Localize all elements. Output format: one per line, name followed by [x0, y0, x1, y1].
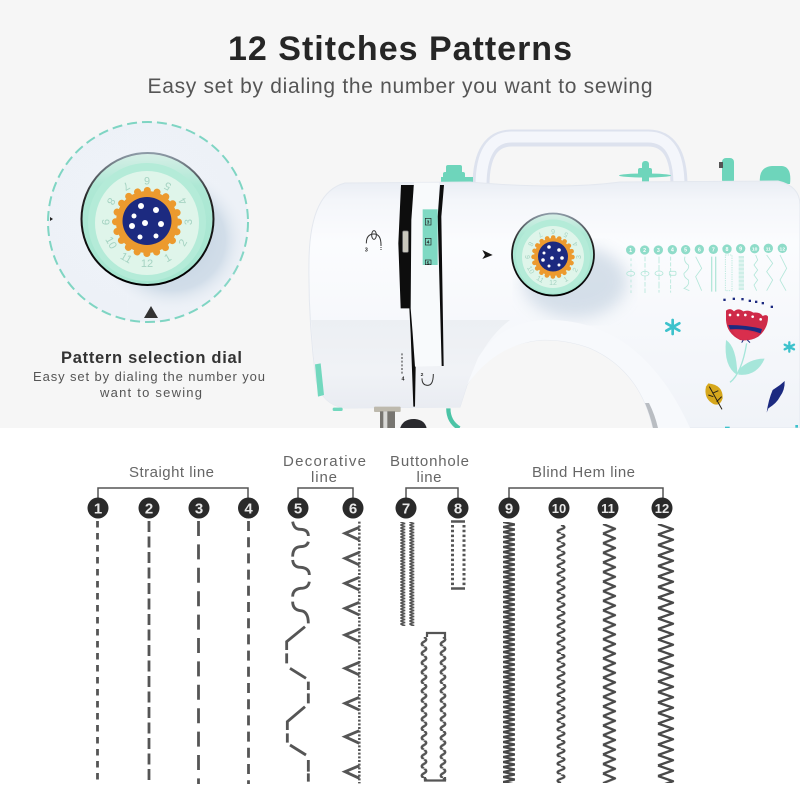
badges 9 to 12: 10 [552, 501, 566, 516]
dial numbers: 8 [104, 195, 117, 207]
stitch badge numbers: 8 [726, 247, 729, 253]
bracket [98, 488, 248, 498]
bottom section background [0, 428, 800, 800]
machine dial numbers: 2 [572, 267, 580, 274]
top section background [0, 0, 800, 428]
dial numbers: 2 [177, 237, 190, 249]
dial numbers: 12 [141, 258, 153, 270]
bracket [509, 488, 663, 498]
stitch badge numbers: 3 [657, 248, 660, 254]
dial cast shadow [523, 246, 627, 318]
green foot [333, 408, 343, 411]
machine dial numbers: 4 [572, 240, 580, 247]
heading: straight line: Straight line [129, 464, 214, 481]
navy feather leaf [767, 381, 785, 413]
heading: blind hem line: Blind Hem line [532, 464, 635, 481]
sewing machine [309, 137, 800, 428]
printed stitch lines [627, 255, 787, 293]
direction arrow [482, 250, 493, 259]
right black slot [438, 185, 444, 366]
heading: decorative line: line [311, 469, 337, 486]
dial numbers: 7 [120, 179, 132, 192]
stitch 9 [503, 522, 515, 783]
bracket [298, 488, 353, 498]
stitch badge numbers: 5 [684, 248, 687, 254]
dial numbers: 4 [177, 195, 190, 207]
stitch badge numbers [629, 246, 785, 254]
green thread [448, 408, 459, 428]
dial numbers: 6 [144, 174, 150, 186]
stitch 8 [451, 522, 465, 588]
subtitle: Easy set by dialing the number you want to sewing [148, 75, 652, 98]
badges 5 and 6 [288, 498, 364, 518]
badges 1 to 4: 1 [94, 500, 102, 518]
green spool knob [441, 165, 473, 183]
large dial knob [82, 153, 214, 285]
presser foot [374, 407, 427, 428]
stitch number badges [626, 244, 787, 255]
stitch 11 [601, 524, 617, 783]
badges 9 to 12 [498, 498, 672, 518]
left green latch [315, 363, 324, 397]
flower leaves [726, 340, 765, 382]
dial numbers: 3 [183, 219, 195, 225]
stitch badge numbers: 12 [780, 246, 785, 252]
machine dial [512, 214, 594, 296]
machine dial numbers: 7 [536, 230, 543, 238]
stitch badge numbers: 2 [643, 248, 646, 254]
group: blind hem line [498, 464, 675, 783]
pointer triangle [144, 306, 158, 318]
badges 5 and 6: 6 [349, 500, 357, 518]
stitch badge numbers: 4 [671, 248, 674, 254]
stitch badge numbers: 10 [752, 247, 758, 253]
bracket [406, 488, 458, 498]
guide number 3: 3 [365, 248, 368, 254]
green wheel [760, 166, 790, 184]
spool pin on handle [619, 161, 671, 187]
arch rim [467, 320, 690, 428]
arch opening shadow [645, 403, 658, 428]
small teal asterisk [785, 342, 794, 352]
stitch 6 [345, 522, 359, 783]
flower dots [723, 298, 773, 308]
tension numbers: 3 [427, 219, 430, 225]
dial caption text: want to sewing [99, 385, 202, 400]
dial caption heading: Pattern selection dial [61, 349, 242, 367]
bottom teal dots [725, 425, 798, 428]
stitch badge numbers: 1 [629, 248, 632, 254]
badges 5 and 6: 5 [294, 500, 302, 518]
machine dial numbers: 10 [525, 265, 535, 275]
machine dial numbers: 8 [526, 240, 534, 247]
stitch 4 [247, 521, 250, 784]
stitch 7 [400, 522, 414, 626]
badges 9 to 12: 12 [655, 501, 669, 516]
machine dial numbers: 1 [563, 276, 570, 284]
dial numbers: 11 [118, 250, 134, 266]
tension numbers [425, 218, 431, 266]
stitch 2 [148, 521, 150, 782]
machine dial numbers: 9 [523, 255, 530, 259]
dial numbers: 9 [99, 219, 111, 225]
machine dial numbers: 12 [549, 280, 557, 287]
large teal asterisk [666, 320, 679, 334]
guide number 4 [402, 353, 405, 383]
dial numbers: 1 [162, 252, 174, 265]
stitch badge numbers: 9 [739, 247, 742, 253]
pointer mark [50, 217, 53, 221]
title: 12 Stitches Patterns [228, 30, 572, 68]
knob shadow [98, 170, 246, 310]
badges 1 to 4 [88, 498, 259, 518]
stitch badge numbers: 6 [698, 247, 701, 253]
stitch badge numbers: 11 [766, 246, 771, 252]
center cover [411, 183, 442, 367]
printed stitch chart and flowers [626, 244, 798, 428]
dial numbers [99, 174, 195, 270]
group: straight line [88, 464, 259, 784]
stitch 3 [197, 521, 200, 784]
heading: buttonhole line: line [416, 469, 442, 486]
badges 7 and 8: 7 [402, 500, 410, 518]
carry handle [481, 137, 679, 186]
dial flower dots [129, 203, 164, 240]
panel: stitch patterns [88, 453, 675, 784]
group: buttonhole line [390, 453, 469, 780]
machine body [309, 181, 800, 428]
badges 1 to 4: 4 [244, 500, 253, 518]
stitch badge numbers: 7 [712, 247, 715, 253]
stitch 10 [554, 525, 568, 783]
group: decorative line [283, 453, 366, 783]
stitch 1 [96, 521, 99, 781]
lower buttonhole stitch [420, 633, 447, 780]
stitch 5 [287, 522, 309, 782]
machine dial numbers: 5 [563, 230, 570, 238]
yellow leaf [705, 383, 723, 409]
silver take-up lever [403, 231, 408, 252]
green post [719, 158, 734, 184]
tension numbers: 5 [427, 260, 430, 266]
dashed magnifier circle [48, 122, 248, 322]
guide number 2: 2 [421, 372, 424, 378]
panel: enlarged dial [48, 122, 248, 322]
left black slot [398, 185, 416, 407]
machine dial numbers: 11 [535, 275, 545, 285]
guide number 4: 4 [402, 377, 405, 383]
heading: buttonhole line: Buttonhole [390, 453, 469, 470]
machine dial numbers: 6 [551, 227, 555, 234]
badges 1 to 4: 2 [145, 500, 153, 518]
heading: decorative line: Decorative [283, 453, 366, 470]
badges 9 to 12: 11 [601, 501, 615, 516]
badges 7 and 8 [396, 498, 468, 518]
lower head shading [311, 320, 510, 408]
badges 1 to 4: 3 [195, 500, 203, 518]
guide number 2 [421, 372, 433, 385]
tension numbers: 4 [427, 239, 430, 245]
tension scale [423, 209, 438, 265]
threading channel [315, 183, 493, 428]
red flower [726, 309, 768, 343]
machine dial numbers: 3 [576, 255, 583, 259]
thread guide 3 [366, 231, 381, 251]
badges 9 to 12: 9 [505, 500, 513, 518]
dial caption text: Easy set by dialing the number you [33, 369, 265, 384]
machine dial dots [541, 245, 564, 268]
stitch 12 [656, 524, 675, 783]
dial numbers: 5 [162, 179, 174, 192]
machine dial numbers [523, 227, 583, 287]
badges 7 and 8: 8 [454, 500, 462, 518]
dial numbers: 10 [102, 235, 119, 251]
